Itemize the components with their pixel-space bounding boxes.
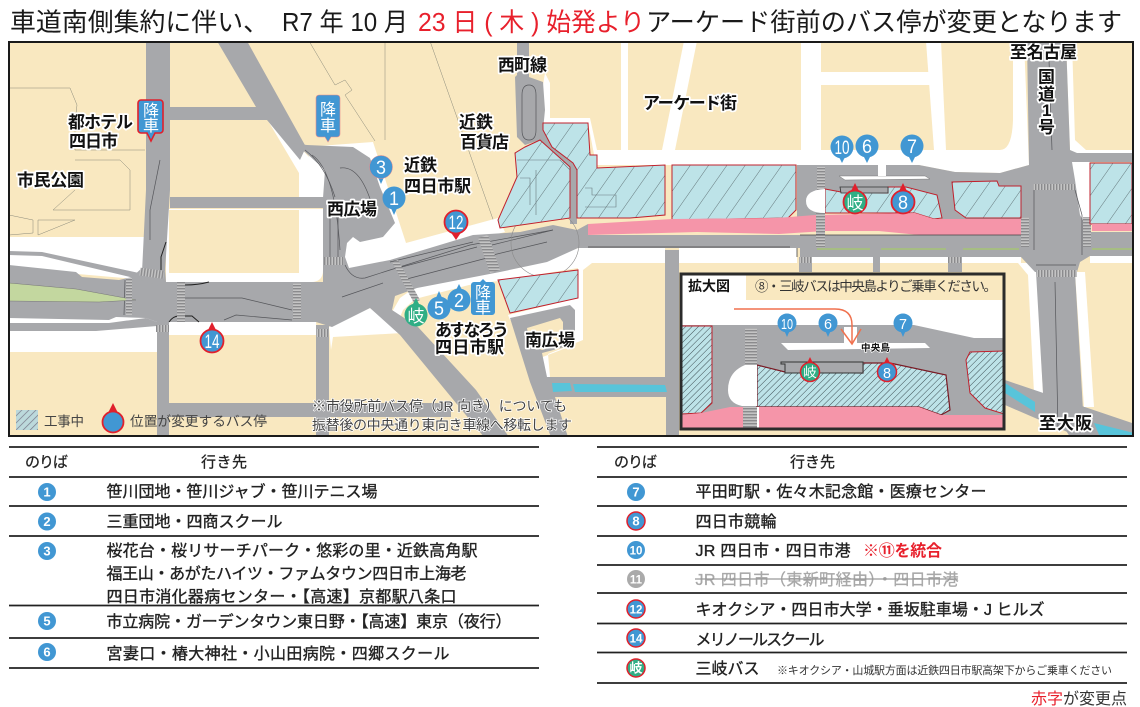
grey roads [9,41,1134,437]
inset stop 6: 6 [824,316,832,333]
drop-off sign: 都ホテル: 降 [143,102,159,120]
relocation note [312,398,572,433]
central island label: 中央島 [861,342,890,354]
left table header [25,454,247,471]
drop-off sign: あすなろう: 降 [475,284,491,302]
inset stop 8 [878,357,896,382]
white dome [806,189,825,213]
drop-off sign: 西広場: 車 [320,117,336,135]
place labels: 都ホテル [68,113,133,132]
bus stop 12: 12 [448,213,464,234]
right table header [614,454,835,471]
row 14: 14 [630,634,643,646]
row 7: 7 [632,484,640,500]
rivers [552,383,1134,437]
row 11: 11 [630,574,643,586]
row 3: 桜花台・桜リサーチパーク・悠彩の里・近鉄高角駅 [106,542,478,560]
row 10: ※⑪を統合 [863,542,942,560]
inset note: ⑧・三岐バスは中央島よりご乗車ください。 [755,279,997,294]
drop-off sign: 西広場 [316,95,340,142]
change key [1031,690,1127,707]
legend [16,403,267,432]
row 3: 福王山・あがたハイツ・ファムタウン四日市上海老 [106,565,466,583]
place labels: 南広場 [525,331,575,350]
pink road [588,213,1021,235]
inset stop 岐: 岐 [803,365,817,380]
inset stop 8: 8 [883,365,891,382]
place labels: 号 [1038,118,1055,137]
row 岐: 岐 [629,660,643,676]
row 岐: ※キオクシア・山城駅方面は近鉄四日市駅高架下からご乗車ください [777,663,1112,677]
bus stop 3 [370,156,392,184]
bus stop 2: 2 [454,291,464,312]
green medians east [817,248,1132,250]
left table header: 行き先 [201,454,247,471]
road details [124,60,1082,430]
row 7: 平田町駅・佐々木記念館・医療センター [696,483,986,501]
row 岐: 三岐バス [696,660,760,678]
row 10 [627,541,942,560]
bus stop 5: 5 [434,299,444,320]
drop-off sign: 都ホテル [138,100,163,141]
bus stop 1: 1 [389,189,399,210]
bus stop 岐 east [844,183,866,214]
bus stop 7: 7 [907,137,917,158]
bus stop 14 [200,322,224,353]
row 14 [627,629,824,649]
row 11: JR 四日市（東新町経由）・四日市港 [696,571,958,589]
building outlines [9,41,495,235]
arrow [734,309,861,344]
inset heading: 拡大図 [688,278,730,294]
left table header: のりば [25,454,68,471]
row 8: 四日市競輪 [696,513,776,531]
construction hatch areas [498,123,1132,313]
place labels: 四日市駅 [435,337,504,357]
row 12: キオクシア・四日市大学・垂坂駐車場・J ヒルズ [696,601,1044,619]
legend: 工事中 [44,414,84,429]
place labels: 百貨店 [460,132,509,152]
inset stop 7 [894,314,912,337]
inset stop 岐 [800,357,820,382]
title: アーケード街前のバス停が変更となります [646,9,1122,37]
bus stop 14: 14 [204,332,220,353]
right table header: のりば [614,454,657,471]
relocation note: ※市役所前バス停（JR 向き）についても [312,398,567,414]
bus stop 8: 8 [898,193,908,214]
bus stop 岐: 岐 [408,307,424,326]
inset map [680,273,1005,430]
white pavements [9,41,1134,393]
green median [9,283,136,302]
place labels: アーケード街 [643,94,737,113]
row 1: 笹川団地・笹川ジャブ・笹川テニス場 [106,482,378,501]
row 2 [38,512,282,531]
bus stop 1 [382,186,406,215]
map panel [8,41,1134,437]
bus stop 6: 6 [862,137,872,158]
place labels: 近鉄 [404,156,437,175]
crosswalks [126,167,1091,337]
drop-off sign: 都ホテル: 車 [143,117,159,135]
bus stop 8 [892,183,914,214]
drop-off sign: 西広場: 降 [320,101,336,119]
bus stop 5 [428,291,450,320]
row 10: 10 [630,546,642,558]
drop-off sign: あすなろう: 車 [475,299,491,317]
inset stop 6 [818,314,838,337]
row 3: 3 [43,544,51,558]
row 12: 12 [630,604,642,616]
row 3 [38,542,478,606]
beige inner blocks [169,210,563,403]
place labels: 西町線 [498,56,547,75]
row 2: 2 [43,514,51,529]
title: R7 年 10 月 [282,9,408,37]
drop-off sign: あすなろう [471,279,495,317]
left table [9,447,539,668]
place labels: 四日市駅 [404,176,471,196]
buildings inside construction area [517,160,616,215]
row 6: 宮妻口・椿大神社・小山田病院・四郷スクール [106,645,450,663]
bus stop 2 [448,284,470,312]
bus stop 10 [830,136,854,163]
bus stop 岐 [404,298,428,326]
row 8 [627,512,776,531]
inset stop 7: 7 [899,316,907,333]
inset stop 10: 10 [781,316,793,333]
place labels [17,43,1092,433]
white island [839,176,930,180]
white verge east of the trunk road [1075,272,1094,407]
place labels: 国 [1038,68,1055,87]
title: 車道南側集約に伴い、 [10,9,269,37]
row 10: JR 四日市・四日市港 [696,542,850,560]
row 5: 5 [43,614,51,628]
row 8: 8 [632,514,640,528]
place labels: 西広場 [327,200,377,219]
relocation note: 振替後の中央通り東向き車線へ移転します [312,417,572,433]
place labels: 近鉄 [459,113,493,132]
row 6: 6 [43,644,51,660]
bus stop 岐 east: 岐 [846,194,864,213]
place labels: 至大阪 [1039,414,1092,433]
right table [597,447,1127,683]
bus stop 12 [444,210,468,240]
row 14: メリノールスクール [696,631,824,649]
place labels: 道 [1038,85,1055,104]
place labels: あすなろう [435,321,509,340]
title: 23 日 ( 木 ) 始発より [418,9,645,37]
row 3: 四日市消化器病センター・【高速】京都駅八条口 [106,588,456,606]
bus stop 10: 10 [834,138,850,159]
place labels: 市民公園 [17,170,84,190]
inset stop 10 [778,314,796,337]
bus stop 6 [856,134,878,163]
row 2: 三重団地・四商スクール [106,513,282,531]
row 5: 市立病院・ガーデンタウン東日野・【高速】東京（夜行） [106,612,512,631]
place labels: 1 [1042,101,1051,120]
bus stop 7 [900,134,924,163]
right table header: 行き先 [790,454,835,471]
title [10,9,1122,37]
bus stop 3: 3 [376,158,386,179]
row 1: 1 [43,484,51,500]
place labels: 四日市 [69,131,118,151]
row 岐 [627,659,1112,678]
place labels: 至名古屋 [1010,43,1077,62]
legend: 位置が変更するバス停 [130,414,267,429]
